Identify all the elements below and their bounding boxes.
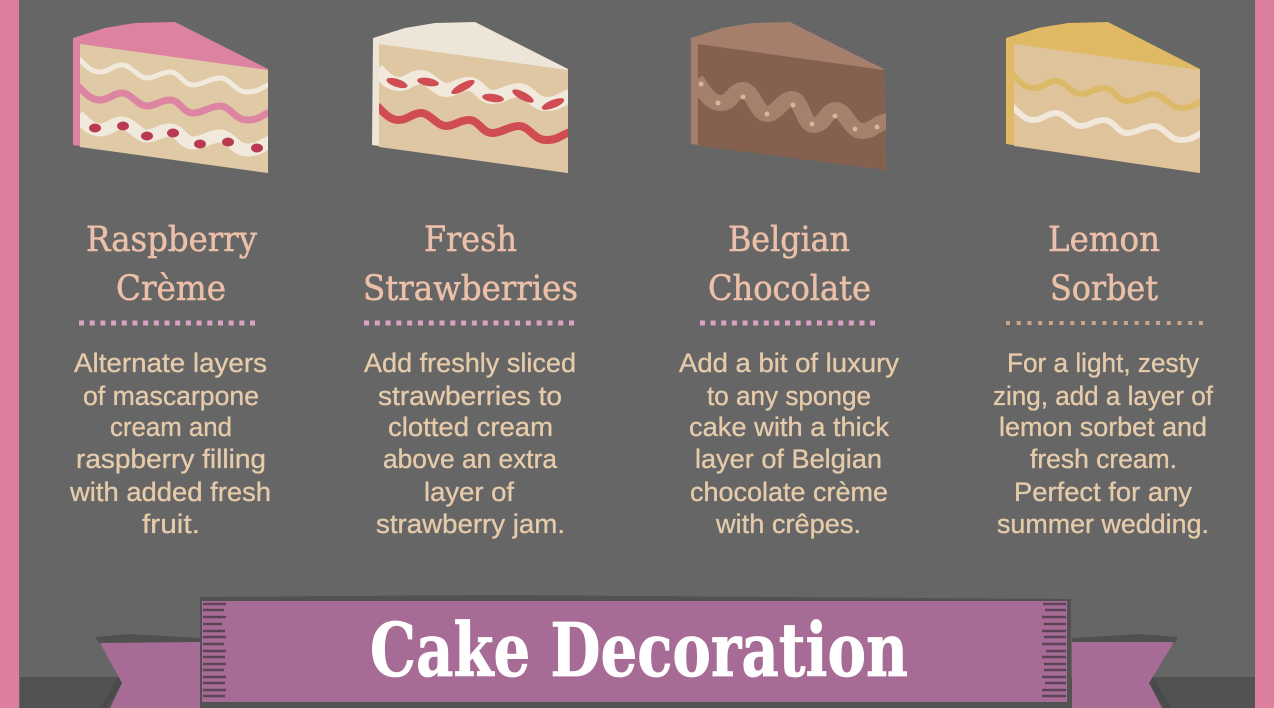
description: Fresh Strawberries: above an extra bbox=[383, 444, 558, 474]
icon: strawberry cake slice bbox=[372, 22, 570, 173]
description: Raspberry Crème: fruit. bbox=[142, 509, 200, 539]
left pink border bbox=[0, 0, 19, 708]
description: Lemon Sorbet: lemon sorbet and bbox=[999, 412, 1207, 442]
description: Lemon Sorbet: fresh cream. bbox=[1030, 444, 1177, 474]
description: Fresh Strawberries: layer of bbox=[424, 477, 515, 507]
banner: Cake Decoration bbox=[95, 595, 1178, 708]
heading: Raspberry Crème: Raspberry bbox=[86, 220, 257, 260]
description: Belgian Chocolate: cake with a thick bbox=[689, 412, 889, 442]
banner main ribbon bbox=[200, 595, 1071, 707]
icon: raspberry cake slice bbox=[73, 22, 270, 173]
description: Raspberry Crème: cream and bbox=[110, 412, 232, 442]
description: Fresh Strawberries bbox=[364, 348, 576, 539]
heading: Belgian Chocolate: Belgian bbox=[728, 220, 850, 260]
heading: Fresh Strawberries bbox=[363, 220, 578, 309]
description: Belgian Chocolate: layer of Belgian bbox=[695, 444, 882, 474]
description: Lemon Sorbet: summer wedding. bbox=[997, 509, 1209, 539]
description: Lemon Sorbet: zing, add a layer of bbox=[993, 381, 1213, 411]
description: Belgian Chocolate bbox=[679, 348, 900, 539]
description: Raspberry Crème: raspberry filling bbox=[76, 444, 266, 474]
heading: Lemon Sorbet: Sorbet bbox=[1050, 269, 1158, 309]
description: Raspberry Crème: of mascarpone bbox=[83, 381, 259, 411]
description: Raspberry Crème: Alternate layers bbox=[74, 348, 267, 378]
description: Fresh Strawberries: strawberries to bbox=[378, 381, 562, 411]
heading: Belgian Chocolate bbox=[708, 220, 871, 309]
panel: Raspberry Crème bbox=[69, 22, 271, 539]
dotted divider bbox=[1006, 321, 1203, 325]
icon: lemon cake slice bbox=[1006, 22, 1204, 173]
description: Lemon Sorbet: Perfect for any bbox=[1014, 477, 1192, 507]
heading: Belgian Chocolate: Chocolate bbox=[708, 269, 871, 309]
icon: chocolate cake slice bbox=[691, 22, 890, 170]
description: Belgian Chocolate: with crêpes. bbox=[715, 509, 861, 539]
panel: Fresh Strawberries bbox=[363, 22, 578, 539]
description: Lemon Sorbet bbox=[993, 348, 1213, 539]
description: Fresh Strawberries: strawberry jam. bbox=[376, 509, 565, 539]
description: Fresh Strawberries: Add freshly sliced bbox=[364, 348, 576, 378]
description: Raspberry Crème: with added fresh bbox=[69, 477, 271, 507]
panel: Lemon Sorbet bbox=[993, 22, 1213, 539]
dotted divider bbox=[364, 320, 574, 326]
banner left fringe bbox=[203, 604, 226, 696]
heading: Lemon Sorbet bbox=[1048, 220, 1160, 309]
description: Lemon Sorbet: For a light, zesty bbox=[1007, 348, 1199, 378]
description: Fresh Strawberries: clotted cream bbox=[388, 412, 553, 442]
heading: Fresh Strawberries: Strawberries bbox=[363, 269, 578, 309]
dotted divider bbox=[79, 320, 255, 326]
panel: Belgian Chocolate bbox=[679, 22, 900, 539]
heading: Cake Decoration: Cake Decoration bbox=[370, 608, 908, 694]
heading: Lemon Sorbet: Lemon bbox=[1048, 220, 1160, 260]
banner left tail bbox=[95, 634, 200, 708]
banner right fringe bbox=[1042, 604, 1066, 696]
dotted divider bbox=[700, 320, 875, 326]
heading: Raspberry Crème: Crème bbox=[116, 269, 226, 309]
banner right tail bbox=[1072, 634, 1178, 708]
description: Belgian Chocolate: Add a bit of luxury bbox=[679, 348, 900, 378]
description: Belgian Chocolate: chocolate crème bbox=[690, 477, 888, 507]
description: Raspberry Crème bbox=[69, 348, 271, 539]
heading: Fresh Strawberries: Fresh bbox=[424, 220, 517, 260]
heading: Raspberry Crème bbox=[86, 220, 257, 309]
right pink border bbox=[1255, 0, 1274, 708]
description: Belgian Chocolate: to any sponge bbox=[707, 381, 871, 411]
